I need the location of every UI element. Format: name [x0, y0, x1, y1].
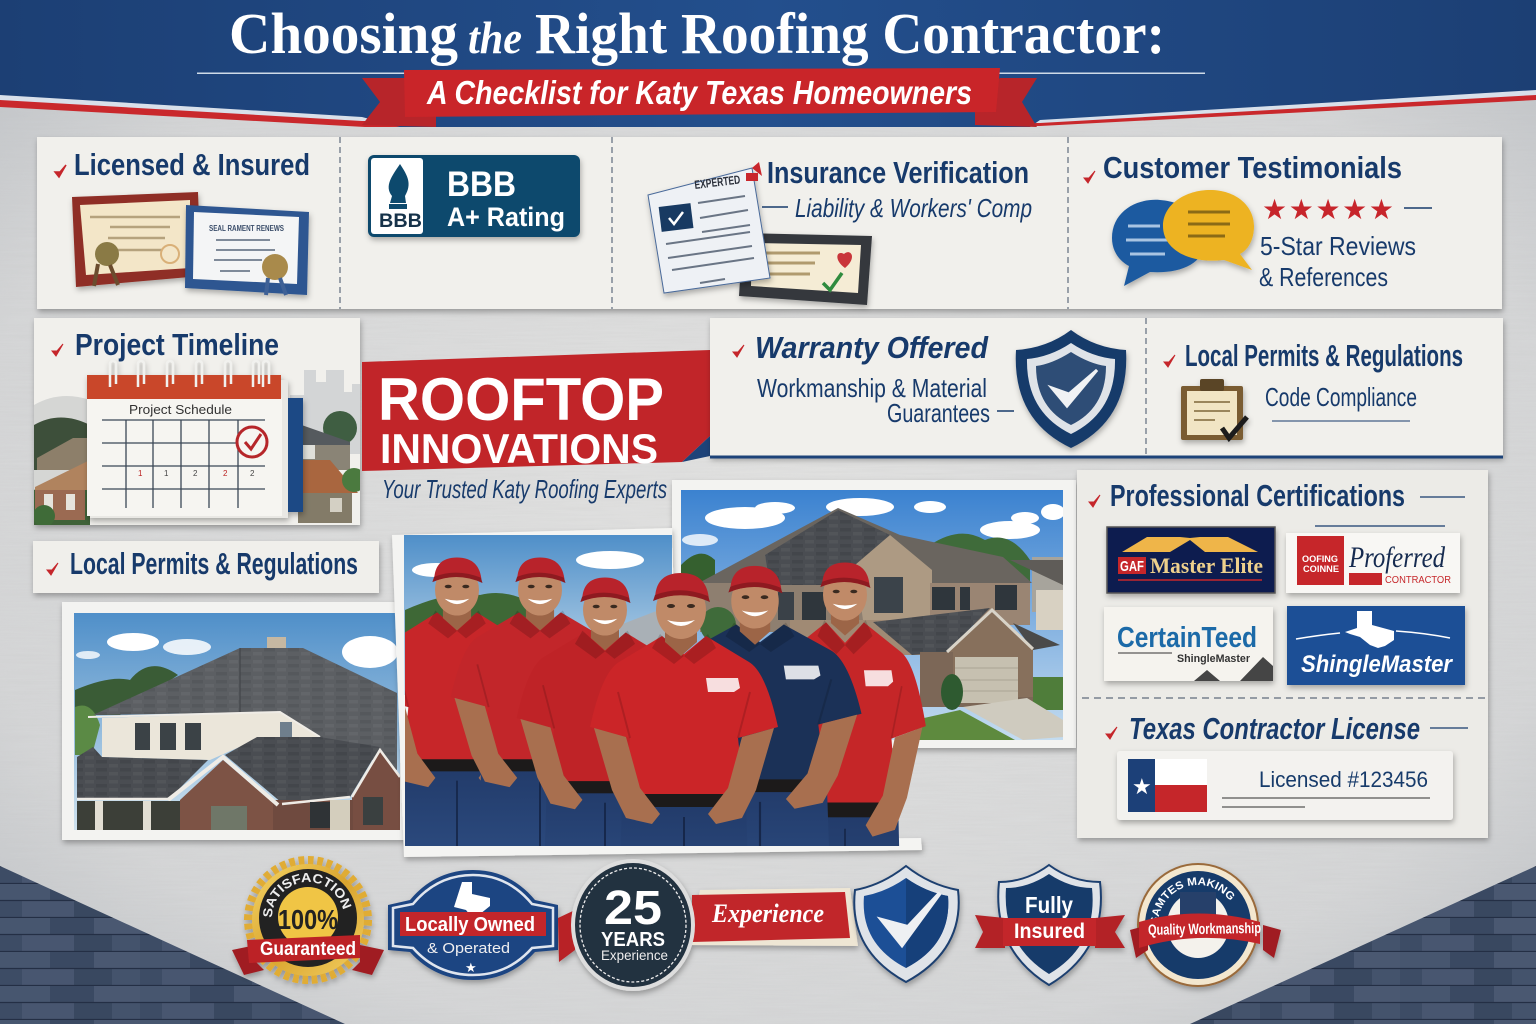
heading: Licensed & Insured	[74, 147, 310, 182]
icon: document and certificate	[648, 162, 872, 305]
logo: GAF: GAF	[1120, 558, 1144, 575]
reviews text	[1259, 231, 1416, 292]
panel: customer testimonials	[1084, 150, 1432, 292]
icon: clipboard	[1181, 379, 1247, 440]
check mark	[52, 344, 63, 356]
subtitle ribbon	[362, 68, 1037, 127]
brand banner: INNOVATIONS	[380, 425, 658, 472]
badge: quality workmanship: Quality Workmanship	[1148, 920, 1261, 939]
badge: 25 years experience	[558, 859, 858, 991]
badge: satisfaction guaranteed	[232, 856, 386, 990]
badge: locally owned	[388, 870, 558, 980]
heading: Insurance Verification	[767, 155, 1029, 190]
panel: right credentials: Texas Contractor License	[1129, 711, 1420, 746]
panel: warranty offered	[710, 318, 1503, 457]
logo: certainteed: ShingleMaster	[1177, 653, 1251, 665]
subheading: Liability & Workers' Comp	[795, 193, 1032, 223]
badge: fully insured: Insured	[1014, 920, 1085, 943]
panel: right credentials	[1077, 470, 1490, 838]
license card	[1117, 751, 1453, 820]
logo: proferred: Proferred	[1348, 541, 1446, 574]
icon: calendar: 2	[223, 469, 228, 478]
icon: document and certificate: EXPERTED	[694, 172, 741, 192]
panel: BBB rating: A+ Rating	[447, 202, 565, 232]
logo: proferred: COINNE	[1303, 564, 1339, 574]
panel: BBB rating: BBB	[447, 165, 516, 204]
icon: shield	[1016, 330, 1126, 448]
badge: 25 years experience: Experience	[711, 899, 824, 928]
panel: customer testimonials: Customer Testimonials	[1103, 150, 1402, 185]
logo: GAF	[1107, 527, 1275, 593]
roof corner left	[0, 866, 345, 1024]
badge: locally owned: Locally Owned	[405, 914, 535, 936]
panel: insurance verification	[648, 155, 1032, 305]
roof corner right	[1190, 866, 1536, 1024]
photo: team	[390, 528, 926, 863]
badge: fully insured	[975, 865, 1125, 985]
heading: Project Timeline	[75, 327, 279, 362]
photo backdrop	[33, 370, 366, 527]
panel: project timeline	[33, 318, 366, 527]
title	[229, 1, 1165, 66]
panel: BBB rating: BBB	[379, 211, 422, 232]
panel: licensed and insured	[55, 147, 310, 295]
icon: chat bubbles	[1112, 190, 1254, 286]
icon: calendar: 2	[250, 469, 255, 478]
icon: calendar: Project Schedule	[129, 402, 232, 417]
badge: fully insured: Fully	[1025, 892, 1073, 918]
warranty text: Workmanship & Material	[757, 373, 987, 403]
badge: quality workmanship	[1129, 863, 1284, 993]
icon: Texas flag	[1128, 759, 1207, 812]
icon: calendar: 2	[193, 469, 198, 478]
warranty text: Guarantees	[887, 398, 990, 428]
photo: house left	[62, 602, 407, 840]
person five	[686, 566, 862, 846]
icon: calendar	[87, 361, 303, 518]
panel: local permits left	[33, 541, 379, 593]
license heading	[1106, 727, 1117, 739]
panel: row one paper	[37, 137, 1502, 309]
warranty text	[757, 373, 990, 428]
person four	[590, 573, 778, 846]
icon: calendar: 1	[164, 469, 169, 478]
badge: 25 years experience: YEARS	[601, 929, 665, 951]
reviews text: 5-Star Reviews	[1260, 231, 1416, 261]
logo: shinglemaster	[1287, 606, 1465, 685]
logo: shinglemaster: ShingleMaster	[1301, 651, 1454, 678]
logo: proferred	[1286, 533, 1460, 593]
logo: GAF: Master Elite	[1150, 553, 1263, 578]
title: Choosing	[229, 1, 458, 66]
title: the	[468, 12, 522, 63]
badge: satisfaction guaranteed: SATISFACTION	[263, 873, 352, 918]
icon: five stars: ★★★★★	[1262, 194, 1394, 225]
badge: check shield	[854, 866, 959, 982]
badge: locally owned: ★	[465, 960, 477, 975]
logo: proferred: OOFING	[1302, 554, 1338, 564]
header banner	[0, 0, 1536, 127]
panel: warranty offered: Warranty Offered	[755, 330, 989, 365]
subtitle ribbon: A Checklist for Katy Texas Homeowners	[426, 74, 972, 111]
tagline: Your Trusted Katy Roofing Experts	[382, 474, 667, 504]
icon: calendar: 1	[138, 469, 143, 478]
brand banner	[362, 350, 710, 504]
icon: certificates: SEAL RAMENT RENEWS	[209, 224, 285, 233]
badge: 25 years experience: Experience	[601, 947, 668, 963]
logo: certainteed	[1104, 607, 1273, 681]
check mark	[746, 173, 758, 181]
title: Right Roofing Contractor:	[535, 1, 1165, 66]
badge: 25 years experience: 25	[604, 882, 662, 935]
brand name: ROOFTOP	[378, 366, 664, 433]
icon: Texas flag: ★	[1132, 774, 1152, 799]
logo: certainteed: CertainTeed	[1117, 622, 1257, 654]
license card: Licensed #123456	[1259, 767, 1428, 792]
icon: BBB flame	[389, 164, 409, 203]
reviews text: & References	[1259, 262, 1388, 292]
panel: local permits top right	[1164, 338, 1463, 440]
panel: local permits top right: Code Compliance	[1265, 382, 1417, 412]
person three	[520, 578, 647, 846]
icon: certificates	[72, 192, 309, 295]
badge: locally owned: & Operated	[427, 940, 510, 957]
panel: BBB rating	[368, 155, 580, 237]
panel: local permits left: Local Permits & Regulations	[70, 546, 358, 581]
badge: satisfaction guaranteed: 100%	[278, 904, 338, 935]
person six	[807, 562, 926, 846]
badge: satisfaction guaranteed: Guaranteed	[260, 939, 356, 960]
person two	[454, 558, 592, 846]
photo: house right	[672, 480, 1076, 748]
logo: proferred: CONTRACTOR	[1385, 575, 1451, 586]
person one	[405, 558, 498, 846]
check mark	[55, 165, 66, 177]
heading: Professional Certifications	[1110, 478, 1405, 513]
badge: quality workmanship: SAMTES MAKING	[1150, 877, 1234, 919]
